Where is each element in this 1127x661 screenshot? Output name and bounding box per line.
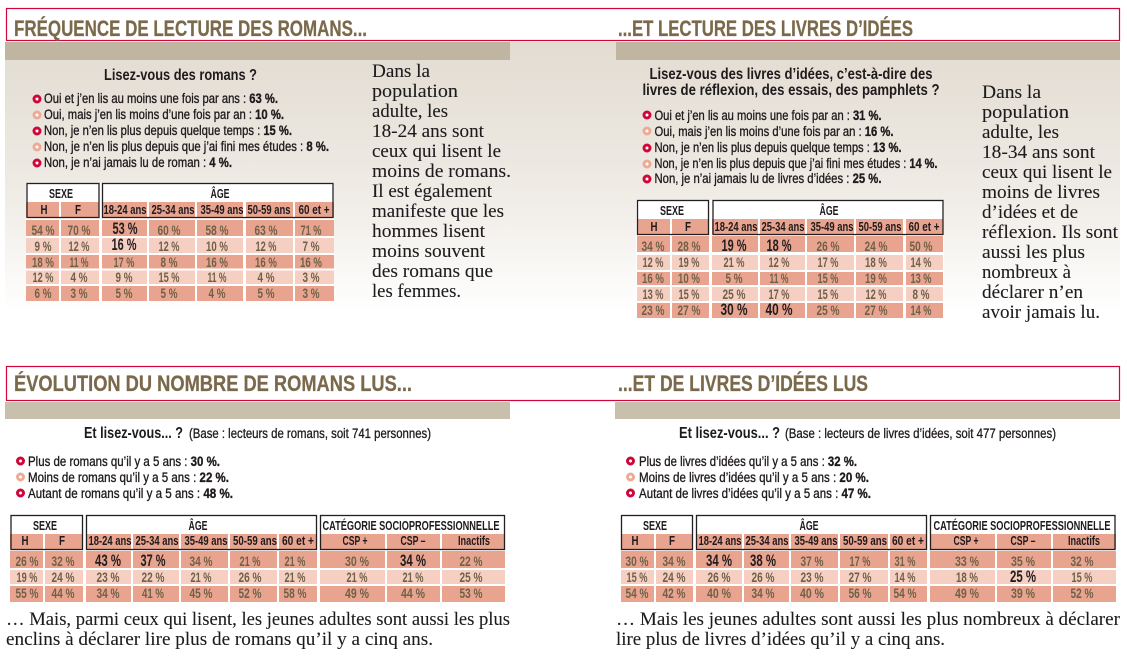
table: romans par sexe et âge: 9 % xyxy=(116,269,133,285)
table: livres d'idées par sexe et âge: 11 % xyxy=(770,270,789,286)
table: romans par sexe et âge: 35-49 ans xyxy=(200,202,244,217)
table: évolution romans par sexe, âge et CSP: 30 % xyxy=(345,553,369,569)
table: évolution romans par sexe, âge et CSP: Inactifs xyxy=(458,533,490,548)
table: évolution romans par sexe, âge et CSP: 43 % xyxy=(95,552,121,570)
legend: réponses livres d'idées: Non, je n’en lis plus depuis que j’ai fini mes études : 14 %. xyxy=(654,156,938,171)
question: évolution livres d'idées: Et lisez-vous... ? xyxy=(679,425,780,442)
table: évolution livres d'idées par sexe, âge et CSP: 32 % xyxy=(1070,553,1094,569)
table: évolution romans par sexe, âge et CSP: CATÉGORIE SOCIOPROFESSIONNELLE xyxy=(322,518,500,533)
table: évolution romans par sexe, âge et CSP: CSP + xyxy=(342,533,368,548)
legend: évolution livres d'idées: Moins de livres d’idées qu’il y a 5 ans : 20 %. xyxy=(639,470,869,485)
table: évolution romans par sexe, âge et CSP: 50-59 ans xyxy=(233,533,277,548)
table: évolution romans par sexe, âge et CSP: 21 % xyxy=(240,553,261,569)
table: romans par sexe et âge: 71 % xyxy=(300,222,322,238)
legend: réponses livres d'idées: Non, je n’ai jamais lu de livres d’idées : 25 %. xyxy=(654,171,882,186)
table: romans par sexe et âge: 12 % xyxy=(32,269,54,285)
table: romans par sexe et âge: 53 % xyxy=(112,220,138,238)
question: évolution romans: (Base : lecteurs de romans, soit 741 personnes) xyxy=(189,426,431,441)
legend: évolution romans: Autant de romans qu’il y a 5 ans : 48 %. xyxy=(28,486,233,501)
table: évolution livres d'idées par sexe, âge et CSP: 50-59 ans xyxy=(843,533,887,548)
legend: réponses livres d'idées: Oui et j’en lis au moins une fois par an : 31 %. xyxy=(654,108,882,123)
table: livres d'idées par sexe et âge: 23 % xyxy=(642,302,665,318)
text block: commentaire romans: des romans que xyxy=(372,261,493,282)
table: livres d'idées par sexe et âge: 30 % xyxy=(720,301,748,319)
table: livres d'idées par sexe et âge: 15 % xyxy=(678,286,700,302)
table: évolution romans par sexe, âge et CSP: 34 % xyxy=(400,552,426,570)
legend: évolution livres d'idées xyxy=(628,454,871,501)
table: évolution romans par sexe, âge et CSP: 21 % xyxy=(284,569,306,585)
table: livres d'idées par sexe et âge: 26 % xyxy=(816,238,840,254)
table: romans par sexe et âge: H xyxy=(40,202,48,217)
text block: commentaire livres d'idées: moins de livres xyxy=(982,182,1100,203)
table: livres d'idées par sexe et âge: 15 % xyxy=(818,270,839,286)
text block: commentaire romans: population xyxy=(372,81,459,102)
table: livres d'idées par sexe et âge: 8 % xyxy=(912,286,930,302)
table: évolution romans par sexe, âge et CSP: 18-24 ans xyxy=(88,533,132,548)
table: livres d'idées par sexe et âge: 40 % xyxy=(766,301,793,319)
text block: commentaire livres d'idées: ceux qui lisent le xyxy=(982,162,1112,183)
table: livres d'idées par sexe et âge: 13 % xyxy=(910,270,932,286)
table: livres d'idées par sexe et âge: 21 % xyxy=(724,254,745,270)
table: évolution livres d'idées par sexe, âge et CSP: 35-49 ans xyxy=(794,533,838,548)
table: livres d'idées par sexe et âge: 13 % xyxy=(642,286,664,302)
question: livres d'idées: Lisez-vous des livres d’idées, c’est-à-dire des xyxy=(650,66,933,83)
table: évolution livres d'idées par sexe, âge et CSP: CSP – xyxy=(1010,533,1036,548)
question: livres d'idées: livres de réflexion, des essais, des pamphlets ? xyxy=(642,82,940,99)
heading: fréquence de lecture des romans: FRÉQUENCE DE LECTURE DES ROMANS... xyxy=(14,16,367,41)
heading band: fréquence et lecture xyxy=(6,8,1120,41)
table: romans par sexe et âge: 18 % xyxy=(32,254,54,270)
legend: évolution livres d'idées: Plus de livres d’idées qu’il y a 5 ans : 32 %. xyxy=(639,454,857,469)
table: évolution livres d'idées par sexe, âge et CSP: 31 % xyxy=(894,553,916,569)
legend: réponses livres d'idées: Non, je n’en lis plus depuis quelque temps : 13 %. xyxy=(654,140,901,155)
heading: lecture des livres d'idées: ...ET LECTURE DES LIVRES D’IDÉES xyxy=(618,16,913,41)
text block: commentaire romans: moins de romans. xyxy=(372,161,511,182)
table: évolution livres d'idées par sexe, âge et CSP: 34 % xyxy=(752,585,775,601)
table: évolution livres d'idées par sexe, âge et CSP: ÂGE xyxy=(800,518,819,533)
table: romans par sexe et âge: 3 % xyxy=(70,285,88,301)
table: romans par sexe et âge: 60 et + xyxy=(298,202,330,217)
table: évolution romans par sexe, âge et CSP: 23 % xyxy=(96,569,120,585)
table: évolution romans par sexe, âge et CSP: 44 % xyxy=(52,585,75,601)
table: évolution romans par sexe, âge et CSP xyxy=(10,515,505,602)
table: livres d'idées par sexe et âge: 12 % xyxy=(866,286,887,302)
table: romans par sexe et âge: 54 % xyxy=(32,222,55,238)
table: livres d'idées par sexe et âge: 60 et + xyxy=(908,219,940,234)
table: évolution livres d'idées par sexe, âge et CSP: 39 % xyxy=(1011,585,1035,601)
table: évolution romans par sexe, âge et CSP: 21 % xyxy=(284,553,306,569)
table: livres d'idées par sexe et âge xyxy=(636,200,944,320)
table: romans par sexe et âge: 25-34 ans xyxy=(152,202,194,217)
table: romans par sexe et âge: 5 % xyxy=(258,285,275,301)
text block: commentaire livres d'idées: 18-34 ans sont xyxy=(982,142,1096,163)
table: évolution romans par sexe, âge et CSP: 21 % xyxy=(346,569,368,585)
legend: réponses romans: Non, je n’ai jamais lu de roman : 4 %. xyxy=(44,155,232,170)
table: évolution romans par sexe, âge et CSP: 44 % xyxy=(401,585,425,601)
table: romans par sexe et âge: 5 % xyxy=(160,285,178,301)
table: romans par sexe et âge: 3 % xyxy=(302,269,320,285)
question: livres d'idées xyxy=(642,66,940,99)
table: évolution romans par sexe, âge et CSP: 52 % xyxy=(238,585,262,601)
table: romans par sexe et âge: 15 % xyxy=(158,269,180,285)
table: livres d'idées par sexe et âge: 12 % xyxy=(642,254,664,270)
table: évolution livres d'idées par sexe, âge et CSP: 56 % xyxy=(848,585,872,601)
table: livres d'idées par sexe et âge: 15 % xyxy=(818,286,839,302)
question: évolution romans xyxy=(84,425,431,442)
legend: réponses romans: Oui et j’en lis au moins une fois par ans : 63 %. xyxy=(44,91,278,106)
table: livres d'idées par sexe et âge: 34 % xyxy=(642,238,665,254)
table: romans par sexe et âge: 58 % xyxy=(206,222,229,238)
table: évolution romans par sexe, âge et CSP: 22 % xyxy=(460,553,483,569)
text block: commentaire romans: adulte, les xyxy=(372,101,448,122)
table: évolution romans par sexe, âge et CSP: 34 % xyxy=(190,553,213,569)
text block: commentaire livres d'idées: déclarer n’en xyxy=(982,282,1083,303)
table: romans par sexe et âge: 11 % xyxy=(70,254,89,270)
text block: commentaire livres d'idées: population xyxy=(982,102,1070,123)
table: romans par sexe et âge: 50-59 ans xyxy=(248,202,290,217)
text block: conclusion romans xyxy=(6,609,510,650)
text block: commentaire livres d'idées: avoir jamais lu. xyxy=(982,302,1100,323)
table: romans par sexe et âge: 16 % xyxy=(300,254,322,270)
legend: réponses romans: Non, je n’en lis plus depuis quelque temps : 15 %. xyxy=(44,123,292,138)
table: romans par sexe et âge: 6 % xyxy=(34,285,52,301)
table: évolution romans par sexe, âge et CSP: 35-49 ans xyxy=(184,533,228,548)
table: évolution livres d'idées par sexe, âge et CSP: 14 % xyxy=(894,569,916,585)
table: livres d'idées par sexe et âge: 14 % xyxy=(910,254,932,270)
text block: commentaire romans: ceux qui lisent le xyxy=(372,141,501,162)
table: romans par sexe et âge: 16 % xyxy=(255,254,277,270)
table: évolution livres d'idées par sexe, âge et CSP: 34 % xyxy=(662,553,686,569)
table: romans par sexe et âge: 12 % xyxy=(158,238,180,254)
table: romans par sexe et âge: 12 % xyxy=(256,238,277,254)
table: livres d'idées par sexe et âge: 12 % xyxy=(768,254,790,270)
table: livres d'idées par sexe et âge: 18-24 ans xyxy=(714,219,758,234)
table: évolution livres d'idées par sexe, âge et CSP: 25-34 ans xyxy=(746,533,788,548)
text block: commentaire livres d'idées: réflexion. Ils sont xyxy=(982,222,1119,243)
legend: évolution romans xyxy=(18,454,233,501)
table: romans par sexe et âge: 8 % xyxy=(160,254,178,270)
table: évolution livres d'idées par sexe, âge et CSP: 54 % xyxy=(626,585,649,601)
text block: commentaire romans: moins souvent xyxy=(372,241,486,262)
panel: lecture des livres d'idées xyxy=(616,42,1120,323)
table: livres d'idées par sexe et âge: 25 % xyxy=(722,286,746,302)
table: évolution romans par sexe, âge et CSP: 60 et + xyxy=(282,533,314,548)
text block: commentaire livres d'idées: aussi les plus xyxy=(982,242,1085,263)
table: évolution livres d'idées par sexe, âge et CSP: F xyxy=(669,533,675,548)
text block: commentaire romans xyxy=(372,61,511,302)
text block: commentaire livres d'idées xyxy=(982,82,1119,323)
table: livres d'idées par sexe et âge: 35-49 ans xyxy=(810,219,854,234)
table: livres d'idées par sexe et âge: 19 % xyxy=(678,254,700,270)
text block: commentaire livres d'idées: nombreux à xyxy=(982,262,1072,283)
table: évolution livres d'idées par sexe, âge et CSP: 26 % xyxy=(708,569,731,585)
table: évolution livres d'idées par sexe, âge et CSP: 54 % xyxy=(894,585,917,601)
table: évolution romans par sexe, âge et CSP: 34 % xyxy=(96,585,120,601)
table: évolution romans par sexe, âge et CSP: 32 % xyxy=(52,553,75,569)
table: évolution livres d'idées par sexe, âge et CSP: 34 % xyxy=(706,552,732,570)
table: évolution livres d'idées par sexe, âge et CSP: 18-24 ans xyxy=(698,533,742,548)
table: livres d'idées par sexe et âge: 25-34 ans xyxy=(762,219,804,234)
legend: réponses livres d'idées: Oui, mais j’en lis moins d’une fois par an : 16 %. xyxy=(654,124,894,139)
table: évolution romans par sexe, âge et CSP: F xyxy=(59,533,65,548)
table: évolution romans par sexe, âge et CSP: 37 % xyxy=(140,552,166,570)
table: livres d'idées par sexe et âge: H xyxy=(650,219,658,234)
table: évolution livres d'idées par sexe, âge et CSP: 15 % xyxy=(1072,569,1093,585)
table: romans par sexe et âge: ÂGE xyxy=(210,186,230,201)
table: livres d'idées par sexe et âge: 17 % xyxy=(818,254,839,270)
table: livres d'idées par sexe et âge: 50-59 ans xyxy=(858,219,902,234)
table: évolution romans par sexe, âge et CSP: 24 % xyxy=(52,569,75,585)
text block: commentaire livres d'idées: d’idées et de xyxy=(982,202,1078,223)
table: livres d'idées par sexe et âge: 24 % xyxy=(864,238,888,254)
legend: réponses romans: Non, je n’en lis plus depuis que j’ai fini mes études : 8 %. xyxy=(44,139,329,154)
table: romans par sexe et âge xyxy=(26,183,334,303)
table: évolution romans par sexe, âge et CSP: 22 % xyxy=(142,569,165,585)
table: évolution livres d'idées par sexe, âge et CSP: SEXE xyxy=(643,518,667,533)
table: évolution livres d'idées par sexe, âge et CSP: 26 % xyxy=(752,569,775,585)
table: évolution livres d'idées par sexe, âge et CSP: 25 % xyxy=(1010,568,1036,586)
table: livres d'idées par sexe et âge: F xyxy=(685,219,691,234)
table: évolution romans par sexe, âge et CSP: SEXE xyxy=(33,518,57,533)
table: livres d'idées par sexe et âge: 25 % xyxy=(816,302,840,318)
table: évolution romans par sexe, âge et CSP: 19 % xyxy=(16,569,38,585)
table: romans par sexe et âge: SEXE xyxy=(49,186,73,201)
table: évolution livres d'idées par sexe, âge et CSP: 24 % xyxy=(662,569,686,585)
table: évolution romans par sexe, âge et CSP: 41 % xyxy=(142,585,164,601)
table: romans par sexe et âge: 5 % xyxy=(116,285,133,301)
table: romans par sexe et âge: 17 % xyxy=(114,254,135,270)
legend: réponses romans xyxy=(34,91,329,170)
table: romans par sexe et âge: 9 % xyxy=(34,238,52,254)
table: évolution romans par sexe, âge et CSP: CSP – xyxy=(400,533,426,548)
text block: commentaire romans: manifeste que les xyxy=(372,201,504,222)
table: évolution livres d'idées par sexe, âge et CSP: 35 % xyxy=(1011,553,1035,569)
table: livres d'idées par sexe et âge: 10 % xyxy=(678,270,700,286)
table: évolution livres d'idées par sexe, âge et CSP: 40 % xyxy=(800,585,824,601)
question: évolution romans: Et lisez-vous... ? xyxy=(84,425,183,442)
table: livres d'idées par sexe et âge: 27 % xyxy=(678,302,701,318)
table: évolution livres d'idées par sexe, âge et CSP: 52 % xyxy=(1070,585,1094,601)
table: évolution romans par sexe, âge et CSP: 21 % xyxy=(402,569,424,585)
table: romans par sexe et âge: 16 % xyxy=(112,236,137,254)
table: évolution livres d'idées par sexe, âge et CSP: H xyxy=(632,533,638,548)
table: évolution romans par sexe, âge et CSP: ÂGE xyxy=(188,518,208,533)
table: évolution livres d'idées par sexe, âge et CSP: 38 % xyxy=(750,552,776,570)
table: livres d'idées par sexe et âge: 50 % xyxy=(910,238,933,254)
heading: livres d'idées lus: ...ET DE LIVRES D’IDÉES LUS xyxy=(618,371,868,396)
table: évolution romans par sexe, âge et CSP: 21 % xyxy=(190,569,212,585)
table: livres d'idées par sexe et âge: 19 % xyxy=(865,270,887,286)
table: évolution romans par sexe, âge et CSP: 45 % xyxy=(190,585,213,601)
table: romans par sexe et âge: 16 % xyxy=(206,254,228,270)
panel: évolution du nombre de romans lus xyxy=(5,402,510,650)
text block: commentaire romans: Il est également xyxy=(372,181,493,202)
table: évolution livres d'idées par sexe, âge et CSP xyxy=(621,515,1116,602)
table: évolution romans par sexe, âge et CSP: 26 % xyxy=(16,553,39,569)
table: romans par sexe et âge: 70 % xyxy=(68,222,91,238)
text block: commentaire romans: Dans la xyxy=(372,61,431,82)
text block: conclusion romans: … Mais, parmi ceux qui lisent, les jeunes adultes sont aussi les plus xyxy=(6,609,510,630)
table: évolution livres d'idées par sexe, âge et CSP: 18 % xyxy=(956,569,978,585)
table: évolution livres d'idées par sexe, âge et CSP: 15 % xyxy=(626,569,648,585)
table: livres d'idées par sexe et âge: SEXE xyxy=(660,203,684,218)
text block: commentaire livres d'idées: Dans la xyxy=(982,82,1042,103)
table: évolution livres d'idées par sexe, âge et CSP: 17 % xyxy=(850,553,871,569)
table: évolution livres d'idées par sexe, âge et CSP: 40 % xyxy=(707,585,731,601)
table: romans par sexe et âge: 10 % xyxy=(206,238,228,254)
heading band: évolution romans et livres xyxy=(6,366,1120,400)
table: évolution livres d'idées par sexe, âge et CSP: 30 % xyxy=(626,553,649,569)
text block: conclusion romans: enclins à déclarer lire plus de romans qu’il y a cinq ans. xyxy=(6,629,433,650)
table: livres d'idées par sexe et âge: 18 % xyxy=(865,254,887,270)
table: évolution romans par sexe, âge et CSP: 55 % xyxy=(16,585,39,601)
table: romans par sexe et âge: 4 % xyxy=(208,285,226,301)
table: livres d'idées par sexe et âge: 28 % xyxy=(678,238,701,254)
text block: conclusion livres d'idées: … Mais les jeunes adultes sont aussi les plus nombreux à déclarer xyxy=(616,609,1121,630)
table: évolution livres d'idées par sexe, âge et CSP: 23 % xyxy=(800,569,824,585)
table: romans par sexe et âge: 63 % xyxy=(254,222,278,238)
table: évolution romans par sexe, âge et CSP: 58 % xyxy=(284,585,307,601)
table: livres d'idées par sexe et âge: ÂGE xyxy=(820,203,839,218)
legend: évolution romans: Plus de romans qu’il y a 5 ans : 30 %. xyxy=(28,454,220,469)
table: évolution livres d'idées par sexe, âge et CSP: 60 et + xyxy=(892,533,924,548)
table: romans par sexe et âge: 4 % xyxy=(258,269,275,285)
table: livres d'idées par sexe et âge: 5 % xyxy=(726,270,743,286)
text block: commentaire livres d'idées: adulte, les xyxy=(982,122,1059,143)
legend: réponses livres d'idées xyxy=(644,108,938,186)
text block: commentaire romans: hommes lisent xyxy=(372,221,486,242)
legend: évolution livres d'idées: Autant de livres d’idées qu’il y a 5 ans : 47 %. xyxy=(639,486,871,501)
table: livres d'idées par sexe et âge: 27 % xyxy=(864,302,888,318)
table: livres d'idées par sexe et âge: 18 % xyxy=(766,237,792,255)
table: romans par sexe et âge: 3 % xyxy=(302,285,320,301)
table: évolution romans par sexe, âge et CSP: 53 % xyxy=(460,585,483,601)
question: romans: Lisez-vous des romans ? xyxy=(104,67,257,84)
table: évolution livres d'idées par sexe, âge et CSP: Inactifs xyxy=(1068,533,1100,548)
table: évolution livres d'idées par sexe, âge et CSP: CSP + xyxy=(954,533,979,548)
table: livres d'idées par sexe et âge: 19 % xyxy=(722,237,747,255)
table: évolution romans par sexe, âge et CSP: 49 % xyxy=(345,585,369,601)
legend: réponses romans: Oui, mais j’en lis moins d’une fois par an : 10 %. xyxy=(44,107,284,122)
question: évolution livres d'idées xyxy=(679,425,1056,442)
panel: fréquence de lecture des romans xyxy=(5,42,511,303)
text block: commentaire romans: 18-24 ans sont xyxy=(372,121,485,142)
table: romans par sexe et âge: 7 % xyxy=(302,238,320,254)
legend: évolution romans: Moins de romans qu’il y a 5 ans : 22 %. xyxy=(28,470,229,485)
table: livres d'idées par sexe et âge: 14 % xyxy=(910,302,932,318)
table: évolution livres d'idées par sexe, âge et CSP: 42 % xyxy=(662,585,686,601)
table: romans par sexe et âge: 18-24 ans xyxy=(104,202,146,217)
panel: livres d'idées lus xyxy=(615,402,1121,650)
text block: commentaire romans: les femmes. xyxy=(372,281,461,302)
text block: conclusion livres d'idées: lire plus de livres d’idées qu’il y a cinq ans. xyxy=(616,629,945,650)
table: évolution romans par sexe, âge et CSP: 25-34 ans xyxy=(136,533,178,548)
table: romans par sexe et âge: 11 % xyxy=(208,269,227,285)
table: évolution livres d'idées par sexe, âge et CSP: 49 % xyxy=(955,585,979,601)
table: évolution romans par sexe, âge et CSP: 26 % xyxy=(238,569,262,585)
table: évolution romans par sexe, âge et CSP: 25 % xyxy=(460,569,483,585)
heading: évolution du nombre de romans lus: ÉVOLUTION DU NOMBRE DE ROMANS LUS... xyxy=(14,371,412,396)
text block: conclusion livres d'idées xyxy=(616,609,1121,650)
table: évolution livres d'idées par sexe, âge et CSP: 37 % xyxy=(800,553,824,569)
table: romans par sexe et âge: 12 % xyxy=(68,238,90,254)
table: évolution livres d'idées par sexe, âge et CSP: 33 % xyxy=(955,553,979,569)
question: évolution livres d'idées: (Base : lecteurs de livres d’idées, soit 477 personnes) xyxy=(785,426,1056,441)
table: livres d'idées par sexe et âge: 16 % xyxy=(642,270,664,286)
table: romans par sexe et âge: 60 % xyxy=(158,222,181,238)
table: évolution livres d'idées par sexe, âge et CSP: 27 % xyxy=(848,569,872,585)
table: évolution romans par sexe, âge et CSP: H xyxy=(22,533,28,548)
table: livres d'idées par sexe et âge: 17 % xyxy=(768,286,790,302)
table: romans par sexe et âge: F xyxy=(75,202,81,217)
table: romans par sexe et âge: 4 % xyxy=(70,269,88,285)
